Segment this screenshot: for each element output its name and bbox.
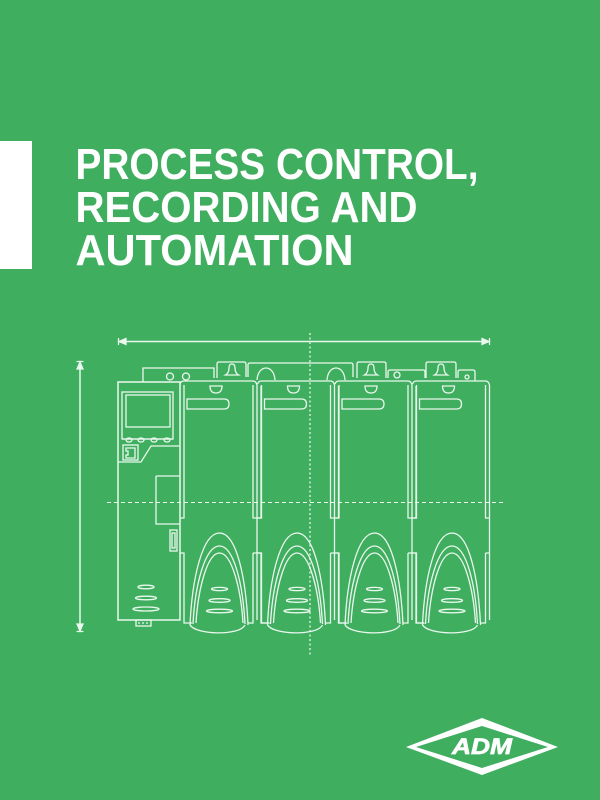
title: PROCESS CONTROL, bbox=[76, 140, 478, 189]
height dimension arrow bbox=[76, 362, 84, 632]
width dimension arrow bbox=[118, 338, 490, 345]
vertical centre line bbox=[309, 333, 311, 655]
power module 2 bbox=[258, 381, 346, 633]
title bbox=[76, 140, 478, 275]
logo diamond bbox=[406, 718, 558, 775]
white accent block bbox=[0, 141, 32, 269]
controller module bbox=[118, 382, 180, 626]
top connectors and terminals bbox=[143, 362, 475, 382]
technical drawing bbox=[76, 333, 504, 655]
power module 4 bbox=[412, 381, 490, 633]
title: AUTOMATION bbox=[76, 226, 354, 275]
power module 3 bbox=[335, 381, 424, 633]
title: RECORDING AND bbox=[76, 183, 418, 232]
horizontal centre line bbox=[107, 502, 504, 504]
ADM logo bbox=[406, 718, 558, 775]
power module 1 bbox=[180, 381, 269, 633]
logo wordmark: ADM bbox=[451, 734, 513, 759]
